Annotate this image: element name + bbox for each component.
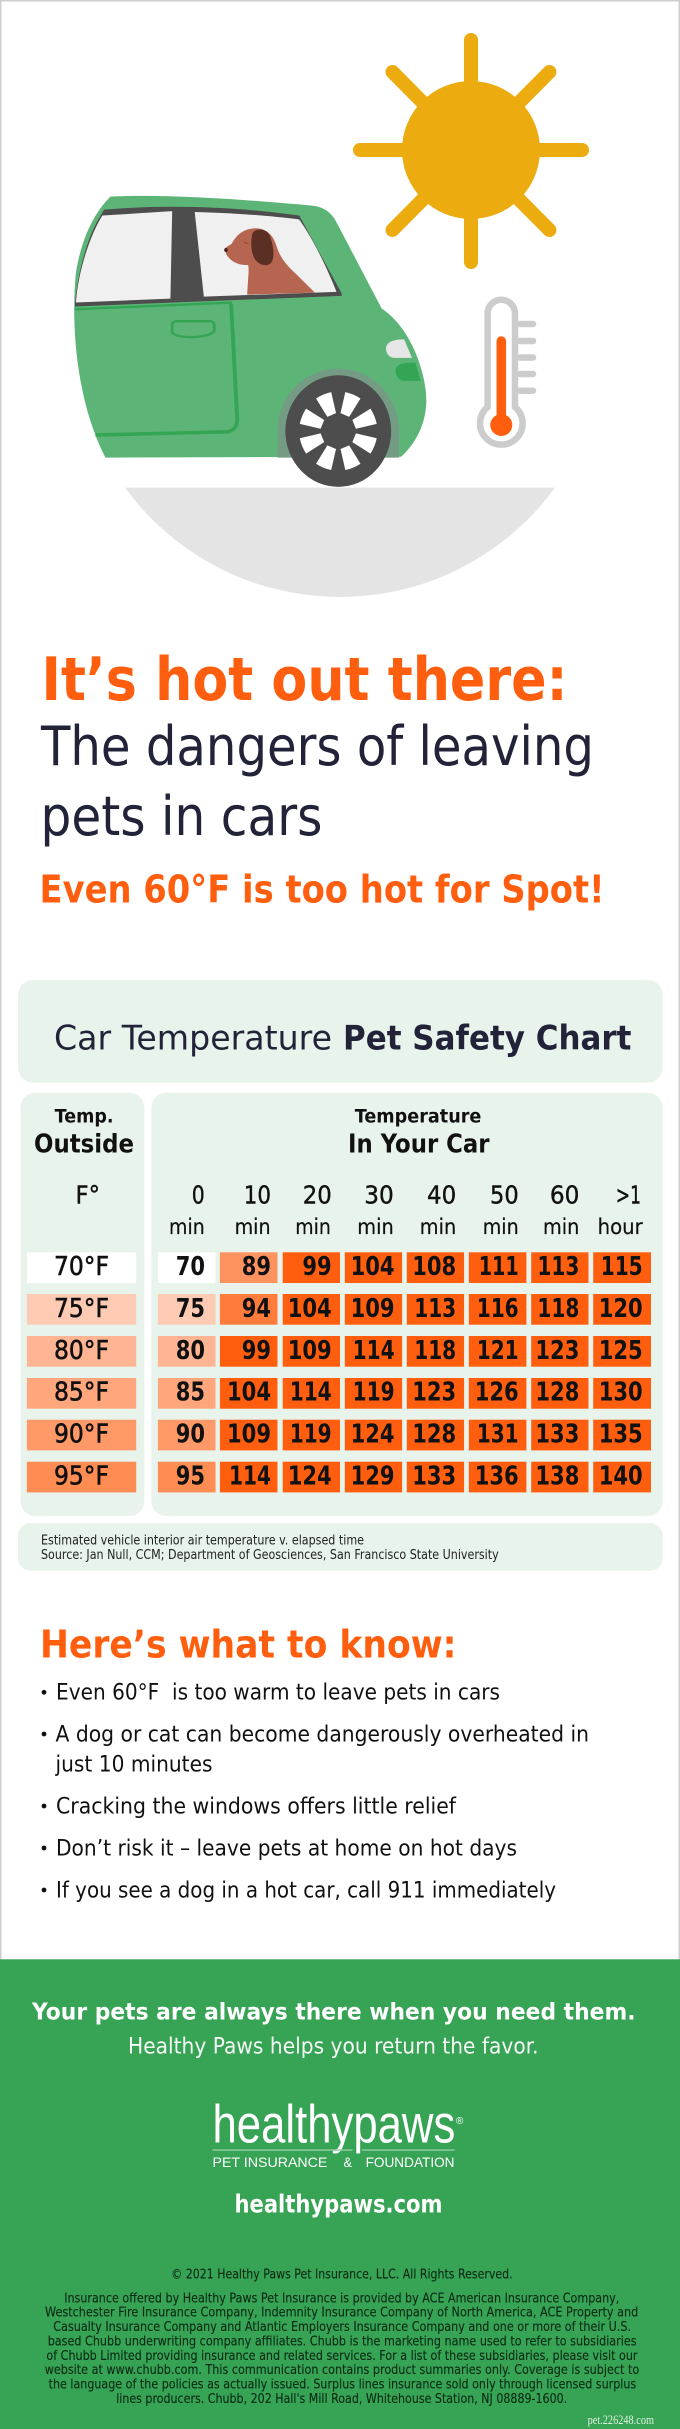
row: 90°F: 128 [412,1420,456,1450]
row: 95°F: 124 [288,1462,332,1492]
door handle [172,321,214,337]
bullet list: just 10 minutes [55,1752,212,1778]
panel: chart title: Car Temperature [54,1018,332,1058]
elapsed time headers: 60 [550,1180,579,1209]
column heading: Outside [34,1129,134,1159]
column heading: Temperature [355,1107,481,1128]
logo: healthypaws: PET INSURANCE [212,2154,327,2170]
row: 85°F: 85 [176,1378,205,1408]
row: 95°F: 136 [475,1462,519,1492]
row: 80°F: 80 [176,1336,205,1366]
outside temperature rows [27,1252,136,1492]
elapsed time headers [169,1180,643,1239]
copyright: © 2021 Healthy Paws Pet Insurance, LLC. All Rights Reserved. [171,2266,513,2282]
row: 70°F: 113 [537,1252,579,1282]
elapsed time headers: min [235,1215,271,1239]
row: 90°F: 119 [290,1420,332,1450]
row: 75°F: 94 [242,1294,271,1324]
legal disclaimer [45,2290,639,2407]
elapsed time headers: min [543,1215,579,1239]
row: 90°F: 109 [227,1420,271,1450]
logo: healthypaws [212,2095,464,2170]
row: 90°F: 124 [351,1420,395,1450]
row: 95°F [158,1462,651,1492]
row: 70°F: 104 [351,1252,395,1282]
outside temperature rows: 75°F [54,1294,109,1324]
bullet list: Even 60°F is too warm to leave pets in cars [56,1679,500,1705]
column heading: Temp. [55,1107,114,1128]
fog light [396,363,421,381]
row: 90°F: 135 [599,1420,643,1450]
row: 95°F: 95 [176,1462,205,1492]
car body [74,196,426,458]
subheading: line 1: The dangers of leaving [40,715,594,778]
icon: sun [360,40,582,262]
elapsed time headers: 0 [192,1180,205,1209]
bullet list: Don’t risk it – leave pets at home on hot days [56,1836,517,1862]
footer subline: Healthy Paws helps you return the favor. [128,2034,539,2059]
elapsed time headers: 50 [490,1180,519,1209]
row: 80°F: 99 [242,1336,271,1366]
row: 80°F: 123 [535,1336,579,1366]
door lines [75,303,237,435]
row: 85°F: 130 [599,1378,643,1408]
headlight [386,339,412,358]
elapsed time headers: >1 [616,1180,641,1209]
panel: chart title: Pet Safety Chart [343,1018,632,1058]
row: 85°F: 126 [475,1378,519,1408]
wheel arch [278,369,399,458]
elapsed time headers: hour [598,1215,643,1239]
row: 90°F [158,1420,651,1450]
row: 75°F: 118 [537,1294,579,1324]
row: 80°F [158,1336,651,1367]
title block [40,645,604,912]
bullet list [42,1679,589,1904]
elapsed time headers: min [483,1215,519,1239]
column heading: In Your Car [348,1129,490,1159]
illustration: green car with dog [74,196,426,487]
icon: ground shadow [125,488,555,597]
outside temperature rows: 90°F [54,1420,109,1450]
row: 95°F: 114 [229,1462,271,1492]
panel: source note: Estimated vehicle interior air temperature v. elapsed time [41,1534,364,1548]
watermark: pet.226248.com [588,2413,654,2427]
row: 70°F [158,1252,651,1283]
logo: healthypaws: & [344,2154,353,2170]
icon: thermometer [480,300,533,445]
row: 85°F: 114 [290,1378,332,1408]
row: 80°F: 125 [599,1336,643,1366]
row: 70°F: 99 [302,1252,332,1282]
panel: source note: Source: Jan Null, CCM; Department of Geosciences, San Francisco State University [41,1548,499,1563]
bullet list: A dog or cat can become dangerously overheated in [56,1722,589,1748]
panel: temp outside column [20,1093,144,1516]
row: 80°F: 118 [414,1336,456,1366]
elapsed time headers: 30 [364,1180,394,1209]
column heading [34,1107,134,1209]
elapsed time headers: min [295,1215,331,1239]
row: 90°F: 90 [176,1420,205,1450]
row: 80°F: 121 [477,1336,519,1366]
elapsed time headers: min [169,1215,205,1239]
website: healthypaws.com [234,2190,442,2218]
footer slogan: Your pets are always there when you need them. [31,1997,635,2025]
row: 95°F: 138 [535,1462,579,1492]
row: 70°F: 70 [176,1252,205,1282]
footer panel [0,1959,680,2429]
logo: healthypaws: FOUNDATION [366,2154,454,2170]
row: 95°F: 140 [599,1462,643,1492]
front window [195,212,337,297]
row: 70°F: 115 [601,1252,643,1282]
rear window [76,211,172,303]
row: 70°F: 108 [412,1252,456,1282]
row: 85°F: 104 [227,1378,271,1408]
row: 75°F: 120 [599,1294,643,1324]
row: 70°F: 111 [479,1252,519,1282]
elapsed time headers: 40 [427,1180,456,1209]
heading: hot out there: It’s hot out there: [42,645,568,715]
bullet list: If you see a dog in a hot car, call 911 immediately [56,1878,556,1904]
heading: here's what to know: Here’s what to know: [40,1622,456,1666]
outside temperature rows: 80°F [54,1336,109,1366]
row: 80°F: 114 [353,1336,395,1366]
column heading: F° [76,1180,100,1209]
elapsed time headers: min [357,1215,394,1239]
row: 95°F: 133 [412,1462,456,1492]
tagline: Even 60°F is too hot for Spot! [40,868,604,912]
row: 85°F: 128 [535,1378,579,1408]
panel: chart title [18,980,663,1083]
window frame [75,207,342,306]
dog in window [224,228,315,295]
row: 75°F [158,1294,651,1325]
row: 75°F: 75 [176,1294,205,1324]
row: 75°F: 116 [477,1294,519,1324]
row: 85°F: 123 [412,1378,456,1408]
row: 80°F: 109 [288,1336,332,1366]
row: 95°F: 129 [351,1462,395,1492]
column heading [348,1107,490,1159]
row: 85°F [158,1378,651,1409]
panel: source note [18,1523,663,1571]
outside temperature rows: 70°F [54,1252,109,1282]
row: 75°F: 109 [351,1294,395,1324]
row: 90°F: 133 [535,1420,579,1450]
wheel [285,375,391,487]
elapsed time headers: min [420,1215,456,1239]
row: 75°F: 104 [288,1294,332,1324]
bullet list: Cracking the windows offers little relief [56,1793,457,1819]
row: 85°F: 119 [353,1378,395,1408]
subheading: line 2: pets in cars [40,785,322,848]
logo: healthypaws: healthypaws [212,2095,455,2155]
logo: healthypaws: ® [456,2116,464,2127]
outside temperature rows: 85°F [54,1378,109,1408]
row: 75°F: 113 [414,1294,456,1324]
elapsed time headers: 10 [244,1180,271,1209]
outside temperature rows: 95°F [54,1462,109,1492]
row: 90°F: 131 [477,1420,519,1450]
elapsed time headers: 20 [303,1180,332,1209]
panel: temperature in your car [151,1093,663,1516]
legal disclaimer: lines producers. Chubb, 202 Hall's Mill Road, Whitehouse Station, NJ 08889-1600. [116,2391,567,2407]
row: 70°F: 89 [242,1252,271,1282]
